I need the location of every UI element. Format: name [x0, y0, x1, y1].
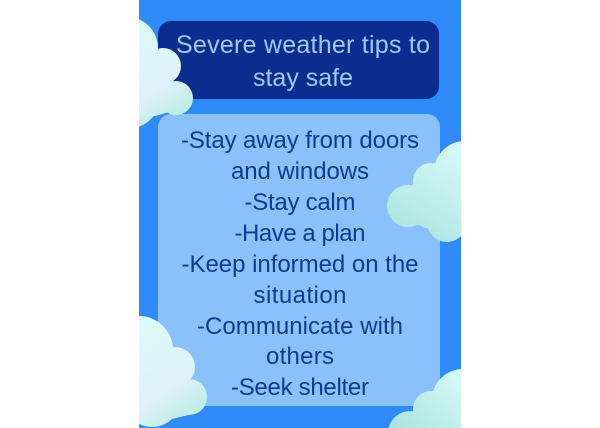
tips list: -Keep informed on the	[182, 251, 418, 278]
icon: cloud bottom right	[388, 369, 461, 428]
icon: cloud middle right	[387, 141, 461, 242]
title panel	[158, 21, 439, 99]
tips list: -Communicate with	[197, 313, 403, 340]
title text: Severe weather tips to	[176, 31, 430, 59]
infographic poster	[139, 0, 461, 428]
tips list: and windows	[231, 158, 369, 185]
title text: stay safe	[253, 64, 353, 92]
title text	[176, 31, 430, 92]
icon: cloud top left	[139, 19, 193, 127]
tips list: -Have a plan	[234, 220, 366, 247]
tips list: -Stay calm	[244, 189, 356, 216]
poster background	[139, 0, 461, 428]
tips list: -Stay away from doors	[181, 127, 419, 154]
tips list: others	[266, 343, 334, 370]
tips list: -Seek shelter	[231, 374, 369, 401]
tips list	[181, 127, 419, 401]
icon: cloud bottom left	[139, 316, 207, 427]
panel: safety tips	[158, 114, 440, 406]
tips list: situation	[254, 282, 346, 309]
